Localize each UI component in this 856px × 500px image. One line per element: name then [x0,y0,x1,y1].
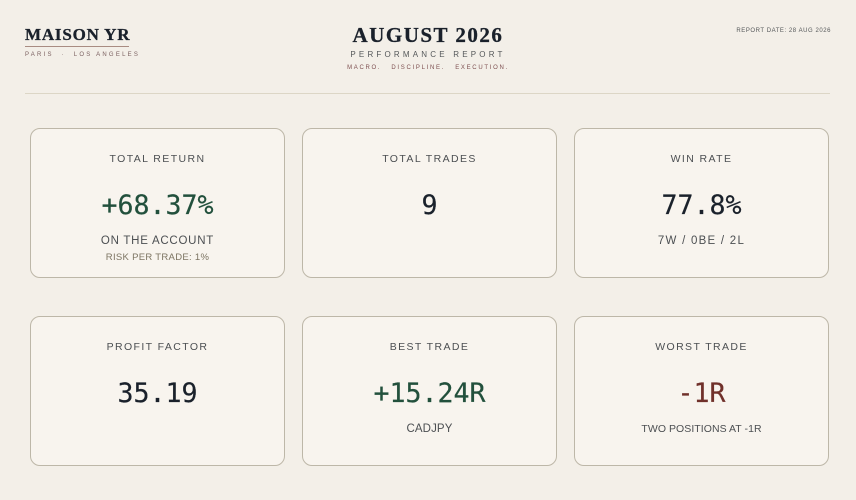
title: AUGUST 2026 [353,23,503,47]
label: TOTAL RETURN [110,153,205,165]
pair: CADJPY [406,422,452,434]
panel: total return [30,128,285,278]
brand locations: PARIS · LOS ANGELES [25,52,140,58]
label: WIN RATE [671,153,732,165]
value: +68.37% [101,190,214,221]
tagline: MACRO. DISCIPLINE. EXECUTION. [347,65,509,71]
value: +15.24R [373,378,486,409]
report date: REPORT DATE: 28 AUG 2026 [736,28,831,34]
risk note: RISK PER TRADE: 1% [106,252,209,263]
label: BEST TRADE [390,341,469,353]
label: PROFIT FACTOR [107,341,208,353]
record: 7W / 0BE / 2L [658,234,745,246]
value: -1R [677,378,726,409]
panel: total trades [302,128,557,278]
panel: win rate [574,128,829,278]
label: TOTAL TRADES [382,153,477,165]
report title block [347,23,509,71]
note: ON THE ACCOUNT [101,234,214,246]
panel: worst trade [574,316,829,466]
value: 77.8% [661,190,742,221]
value: 9 [421,190,438,221]
brand block [25,25,140,58]
panel: profit factor [30,316,285,466]
subtitle: PERFORMANCE REPORT [350,50,506,59]
note: TWO POSITIONS AT -1R [641,422,762,434]
label: WORST TRADE [655,341,748,353]
panel: best trade [302,316,557,466]
value: 35.19 [117,378,198,409]
brand name: MAISON YR [25,25,130,44]
brand underline [25,46,129,47]
